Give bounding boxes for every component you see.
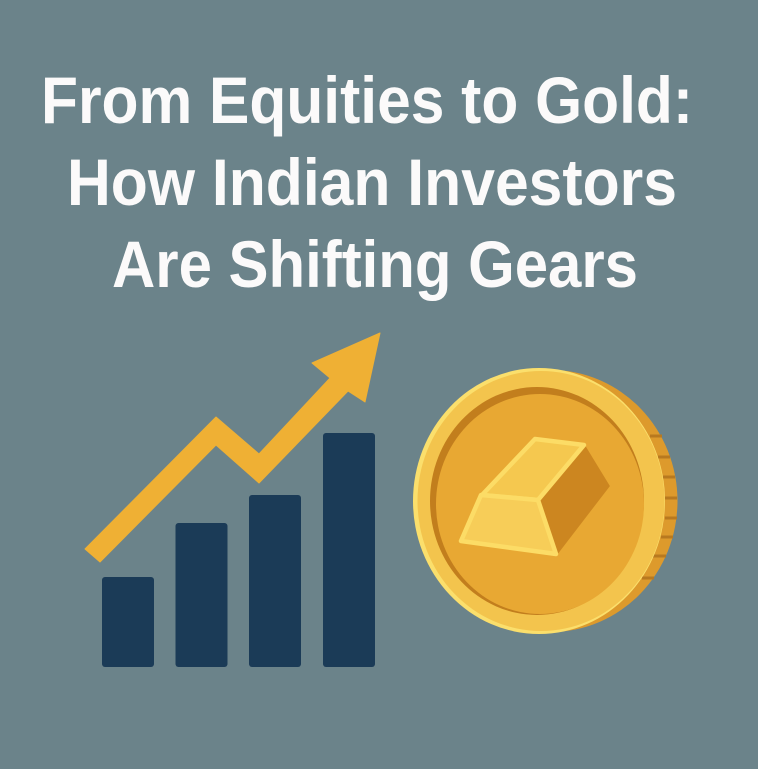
title: Are Shifting Gears (112, 227, 638, 301)
title: How Indian Investors (67, 145, 677, 219)
bar front (461, 495, 556, 554)
coin rim (418, 371, 664, 631)
title: From Equities to Gold: (41, 63, 693, 137)
icon: gold bar (461, 439, 609, 555)
icon: gold coin (413, 368, 678, 634)
coin face (436, 394, 644, 614)
coin edge ridges (642, 436, 677, 578)
coin outer highlight (413, 368, 665, 634)
bar side (541, 445, 609, 555)
coin inner shadow (430, 387, 644, 615)
bar chart (102, 433, 375, 667)
title (41, 63, 693, 301)
coin edge (424, 370, 678, 632)
icon: rising arrow (85, 333, 380, 562)
bar top (482, 439, 584, 500)
